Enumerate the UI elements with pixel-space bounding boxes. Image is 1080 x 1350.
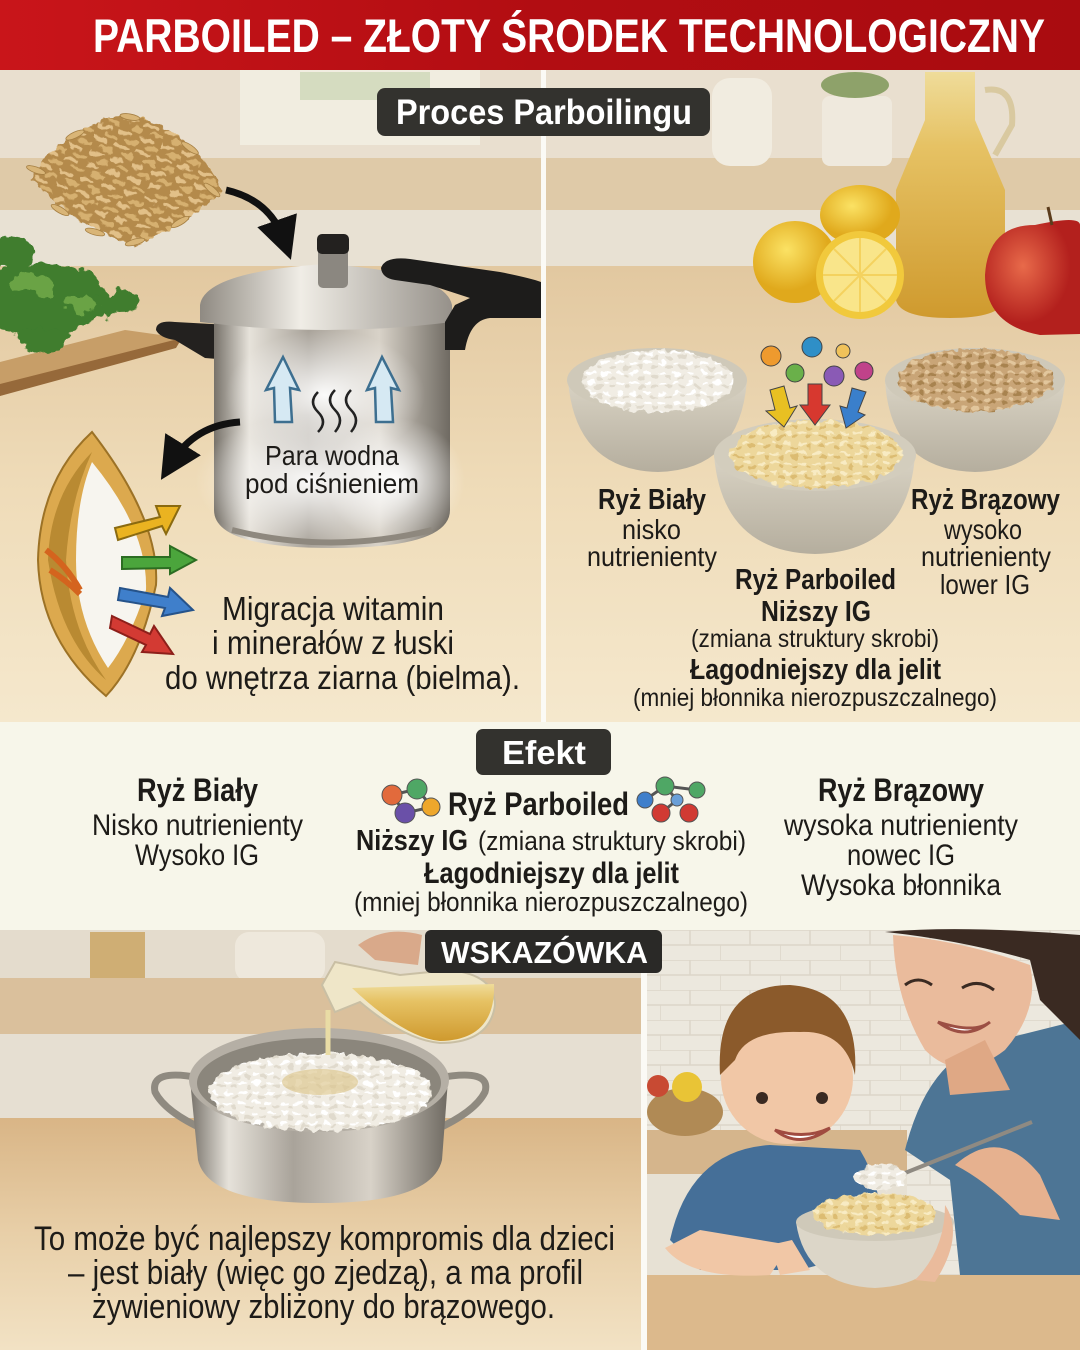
icon: bowl white rice: [567, 348, 747, 472]
text: parboiled note: [633, 564, 997, 712]
icon: oil jug: [896, 72, 1012, 318]
text: white rice note: nisko: [622, 514, 681, 545]
icon: grain cross-section: [38, 432, 156, 696]
text: effect white rice: Wysoko IG: [135, 839, 259, 872]
text: tip description: To może być najlepszy kompromis dla dzieci: [34, 1220, 615, 1258]
icon: molecule right: [637, 777, 705, 822]
text: brown rice note: nutrienienty: [921, 541, 1051, 572]
panel: process background left: [0, 70, 541, 722]
text: steam label: [245, 440, 419, 499]
text: migration description: [165, 590, 520, 696]
text: white rice note: nutrienienty: [587, 541, 717, 572]
text: parboiled note: Ryż Parboiled: [735, 564, 896, 596]
icon: spoon with rice: [854, 1122, 1032, 1190]
illustration: child: [665, 985, 880, 1276]
text: steam label: Para wodna: [265, 440, 399, 471]
text: effect brown rice: Ryż Brązowy: [818, 772, 984, 808]
text: migration description: i minerałów z łuski: [212, 624, 454, 661]
text: effect brown rice: nowec IG: [847, 839, 955, 872]
text: tip description: [34, 1220, 615, 1326]
heading: Proces Parboilingu: Proces Parboilingu: [396, 93, 692, 132]
icon: pile of rice grains: [26, 112, 222, 247]
heading: Efekt: [476, 729, 611, 775]
icon: vinegar pouring: [322, 932, 495, 1055]
icon: steam arrows: [266, 357, 399, 432]
icon: child's rice bowl: [770, 1193, 954, 1288]
text: effect parboiled: (mniej błonnika nierozpuszczalnego): [354, 887, 748, 917]
icon: pot of rice: [155, 1028, 486, 1203]
text: migration description: Migracja witamin: [222, 590, 444, 627]
decorative divider: [641, 930, 647, 1350]
icon: molecule left: [382, 779, 440, 823]
arrow: cooker to grain: [172, 422, 240, 462]
text: effect parboiled: [354, 786, 748, 917]
icon: parsley: [0, 235, 140, 353]
text: tip description: żywieniowy zbliżony do brązowego.: [92, 1288, 555, 1326]
text: effect parboiled: Ryż Parboiled: [448, 786, 629, 822]
text: white rice note: Ryż Biały: [598, 484, 706, 516]
heading: WSKAZÓWKA: WSKAZÓWKA: [441, 934, 648, 970]
icon: apple: [985, 207, 1080, 335]
text: steam label: pod ciśnieniem: [245, 468, 419, 499]
panel: process background right: [546, 70, 1080, 722]
text: effect white rice: Nisko nutrienienty: [92, 809, 303, 842]
text: effect parboiled: (zmiana struktury skrobi): [478, 826, 746, 856]
icon: pressure cooker: [156, 234, 541, 548]
icon: bowl brown rice: [885, 348, 1065, 472]
text: effect parboiled: Łagodniejszy dla jelit: [424, 857, 679, 890]
text: effect brown rice: Wysoka błonnika: [801, 869, 1001, 902]
illustration: mother: [885, 929, 1080, 1275]
text: parboiled note: Niższy IG: [761, 596, 871, 628]
text: parboiled note: (zmiana struktury skrobi): [691, 625, 939, 653]
text: effect parboiled: Niższy IG: [356, 825, 468, 857]
decorative divider: [541, 70, 546, 722]
text: effect brown rice: [783, 772, 1018, 902]
icon: lemons: [753, 185, 904, 319]
arrows: nutrient migration: [110, 506, 196, 654]
heading: Efekt: Efekt: [502, 734, 586, 771]
arrow: grains to cooker: [226, 190, 284, 240]
title banner: [0, 0, 1080, 70]
panel: tip kitchen background: [0, 930, 641, 1350]
text: white rice note: [587, 484, 717, 572]
panel: effect band: [0, 722, 1080, 930]
text: effect brown rice: wysoka nutrienienty: [783, 809, 1018, 842]
text: effect white rice: Ryż Biały: [137, 772, 258, 808]
icon: bowl parboiled rice: [714, 419, 916, 554]
panel: mother and child photo: [647, 930, 1080, 1350]
text: parboiled note: Łagodniejszy dla jelit: [690, 654, 941, 686]
text: parboiled note: (mniej błonnika nierozpuszczalnego): [633, 684, 997, 712]
text: effect white rice: [92, 772, 303, 872]
icon: nutrient dots and arrows: [761, 337, 873, 428]
text: brown rice note: wysoko: [943, 514, 1022, 545]
text: tip description: – jest biały (więc go zjedzą), a ma profil: [68, 1254, 583, 1292]
text: brown rice note: [911, 484, 1060, 600]
text: migration description: do wnętrza ziarna (bielma).: [165, 659, 520, 696]
text: brown rice note: lower IG: [940, 569, 1030, 600]
